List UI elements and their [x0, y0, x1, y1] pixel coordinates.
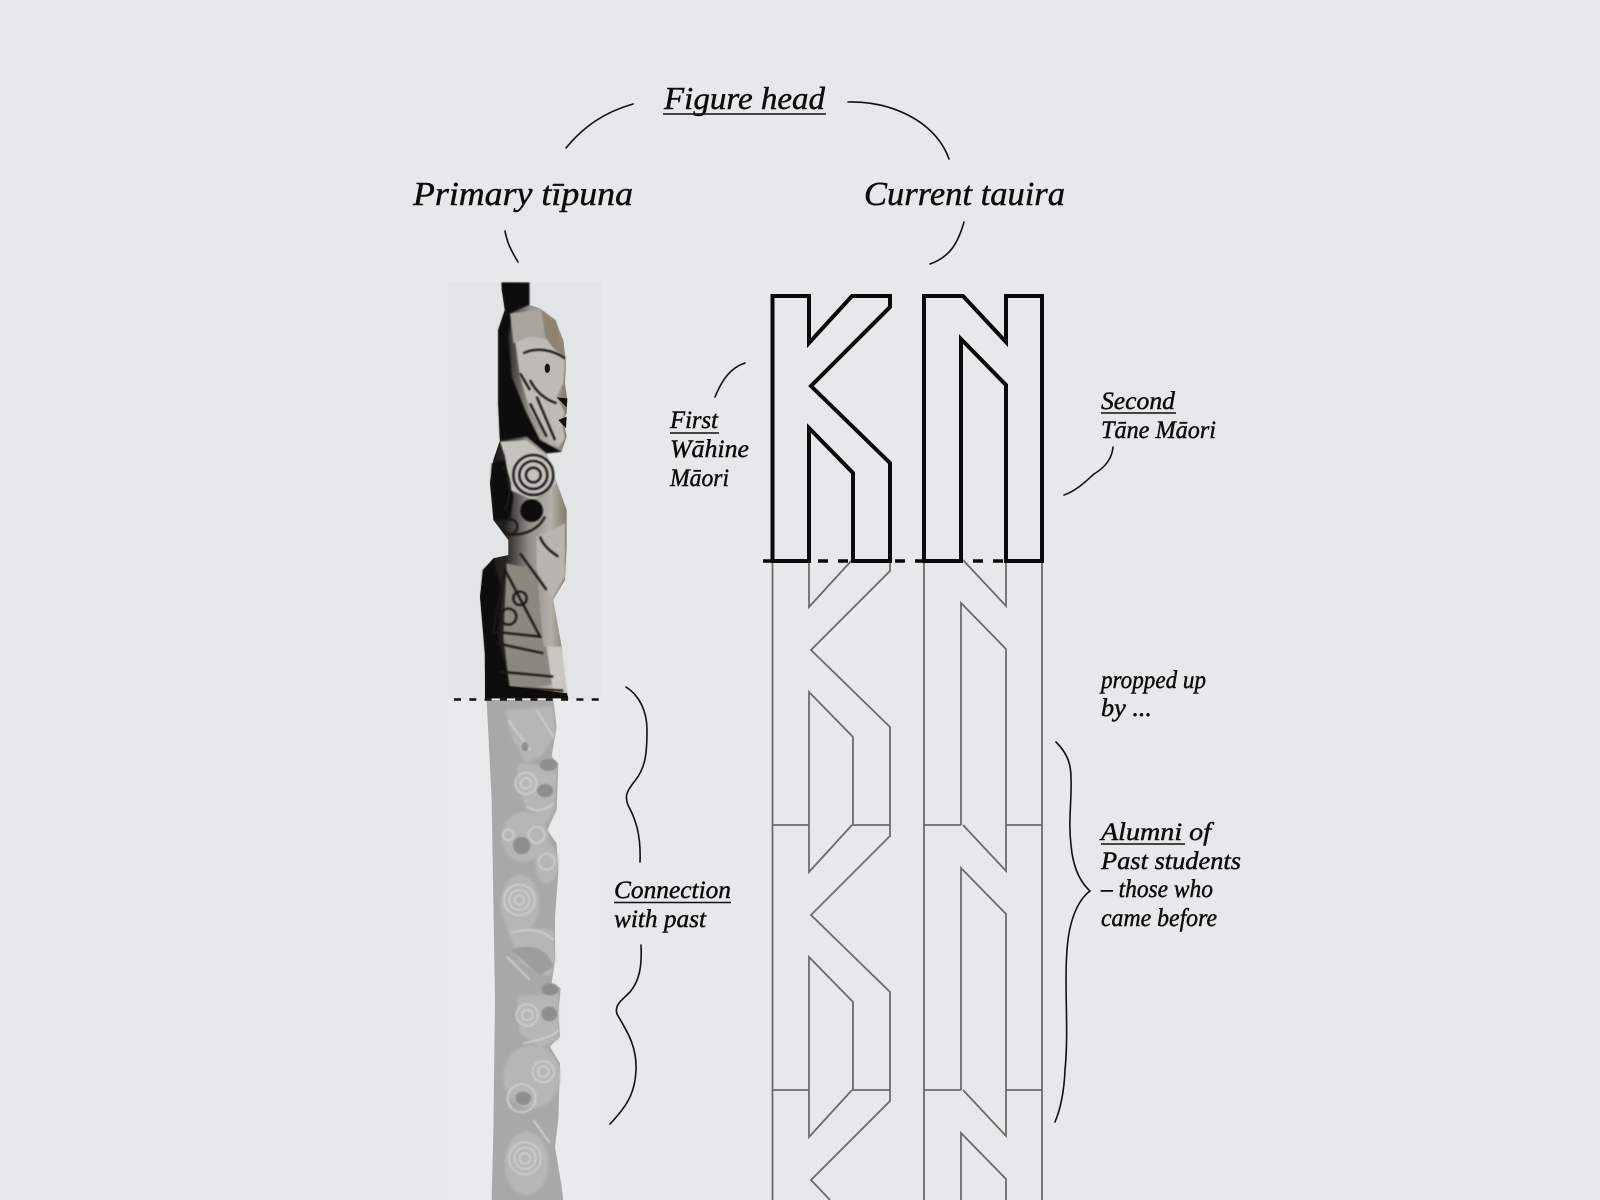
label: Alumni of Past students: Past students [1100, 848, 1241, 875]
brace: alumni [1055, 742, 1090, 1122]
label: Second Tāne Māori: Tāne Māori [1101, 417, 1216, 444]
label: Connection with past: Connection [614, 877, 731, 904]
label: Alumni of Past students: Alumni of [1099, 819, 1214, 846]
connector curves between headings [505, 102, 964, 264]
KN pattern: bold K letterform [772, 296, 890, 561]
heading: Primary tīpuna: Primary tīpuna [412, 176, 633, 213]
label: First Wāhine Māori [669, 407, 749, 492]
heading: Figure head: Figure head [663, 80, 826, 116]
label: propped up by: propped up [1099, 667, 1206, 694]
label: propped up by [1099, 667, 1206, 722]
label: First Wāhine Māori: First [669, 407, 719, 434]
label: First Wāhine Māori: Wāhine [670, 436, 749, 463]
KN pattern: faded repeating lines [772, 560, 1042, 1200]
label: Alumni of Past students: – those who [1100, 876, 1213, 903]
label: Second Tāne Māori: Second [1101, 388, 1176, 415]
brace: connection upper [626, 687, 647, 862]
label: First Wāhine Māori: Māori [669, 465, 729, 492]
KN pattern: bold N letterform [924, 296, 1042, 561]
label: Alumni of Past students [1099, 819, 1241, 932]
label: Second Tāne Māori [1101, 388, 1216, 444]
carved figure: lower faded totem [448, 699, 601, 1200]
connector: Second Tāne Māori [1064, 447, 1113, 495]
label: Connection with past [614, 877, 731, 933]
carved figure: primary tīpuna photograph [448, 282, 601, 699]
label: Alumni of Past students: came before [1101, 905, 1217, 932]
brace: connection lower [610, 945, 641, 1124]
dashed baseline under KN [763, 559, 1042, 563]
label: Connection with past: with past [614, 906, 707, 933]
label: propped up by: by ... [1101, 695, 1152, 722]
dashed cut line across figure [454, 698, 600, 701]
heading: Current tauira: Current tauira [864, 176, 1065, 213]
connector: First Wāhine Māori [715, 363, 745, 397]
